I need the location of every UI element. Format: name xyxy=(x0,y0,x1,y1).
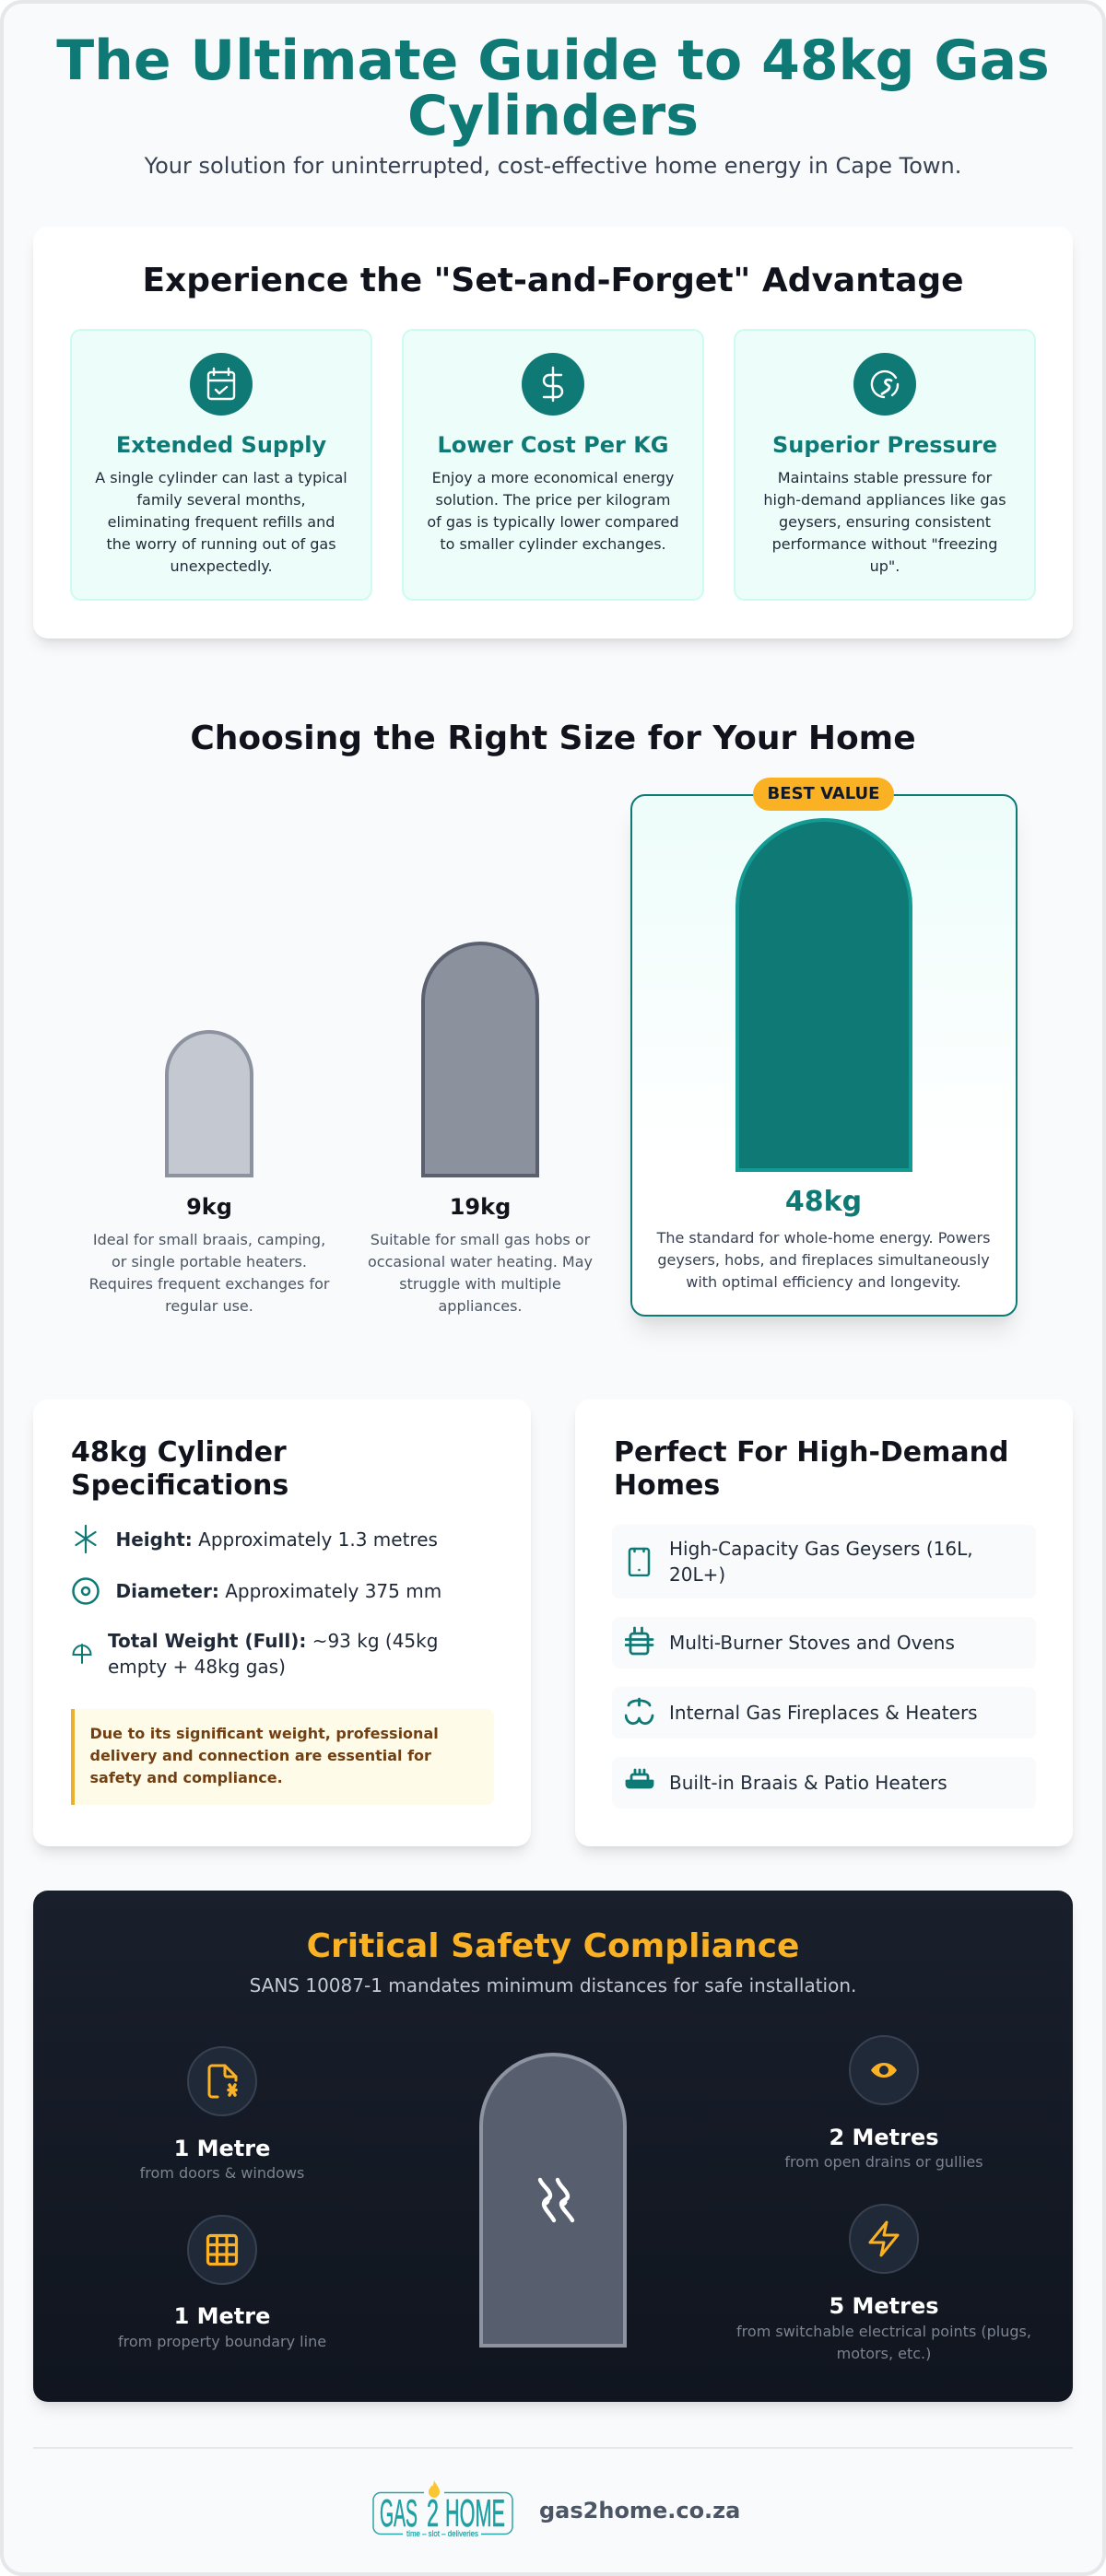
heading: specifications: 48kg Cylinder xyxy=(71,1436,287,1469)
text: total weight xyxy=(108,1630,438,1678)
item: braais and patio heaters xyxy=(612,1757,1036,1809)
logo: Gas 2 Home: 2 xyxy=(427,2491,439,2535)
heading: superior pressure: Superior Pressure xyxy=(772,432,997,458)
icon: pressure gauge xyxy=(853,353,916,416)
text: from drains: from open drains or gullies xyxy=(784,2153,983,2171)
text: superior pressure: Maintains stable pressure for xyxy=(778,469,992,486)
text: extended supply: the worry of running out of gas xyxy=(106,535,336,553)
icon: boundary grid xyxy=(187,2215,257,2285)
text: 9kg description xyxy=(89,1231,330,1315)
card: extended supply xyxy=(70,329,372,601)
text: gas geysers xyxy=(669,1538,973,1586)
text: from electrical points: motors, etc.) xyxy=(837,2345,931,2362)
text: lower cost: of gas is typically lower compared xyxy=(427,513,679,531)
badge: best value: BEST VALUE xyxy=(768,784,879,803)
text: 9kg description: Ideal for small braais, camping, xyxy=(93,1231,325,1248)
icon: gas flame xyxy=(538,2178,575,2222)
text: SANS standard: SANS 10087-1 mandates minimum distances for safe installation. xyxy=(250,1974,856,1996)
label: 5 metres: 5 Metres xyxy=(829,2293,939,2319)
text: 19kg description: Suitable for small gas hobs or xyxy=(371,1231,590,1248)
badge: best value xyxy=(753,778,894,811)
text: 9kg description: Requires frequent exchanges for xyxy=(89,1275,329,1293)
text: superior pressure: up". xyxy=(870,557,900,575)
text: superior pressure: geysers, ensuring consistent xyxy=(779,513,991,531)
text: from boundary: from property boundary line xyxy=(118,2333,326,2350)
text: website: gas2home.co.za xyxy=(539,2498,740,2523)
panel: set-and-forget advantage xyxy=(33,227,1073,638)
text: 19kg description: occasional water heating. May xyxy=(368,1253,593,1270)
heading: advantage: Experience the "Set-and-Forget" Advantage xyxy=(142,262,964,299)
text: 19kg description: appliances. xyxy=(438,1297,522,1315)
text: extended supply xyxy=(95,469,347,575)
heading: extended supply: Extended Supply xyxy=(116,432,326,458)
subtitle: Your solution for uninterrupted, cost-effective home energy in Cape Town. xyxy=(145,153,961,179)
text: extended supply: family several months, xyxy=(136,491,306,509)
heading: high-demand homes xyxy=(614,1436,1008,1502)
item: fireplaces and heaters xyxy=(612,1687,1036,1739)
logo: Gas 2 Home: time – slot – deliveries xyxy=(406,2529,478,2538)
panel: critical safety compliance xyxy=(33,1891,1073,2402)
heading: choosing the right size: Choosing the Right Size for Your Home xyxy=(190,720,916,757)
icon: door and window clearance xyxy=(187,2046,257,2116)
panel: high-demand homes xyxy=(575,1399,1073,1846)
text: diameter: Diameter: Approximately 375 mm xyxy=(116,1580,441,1602)
icon: burner xyxy=(625,1627,654,1655)
heading: high-demand homes: Homes xyxy=(614,1469,720,1502)
text: braais and patio heaters: Built-in Braais & Patio Heaters xyxy=(669,1772,947,1794)
text: lower cost: solution. The price per kilogram xyxy=(435,491,671,509)
icon: diameter xyxy=(72,1577,100,1605)
title: The Ultimate Guide to 48kg Gas xyxy=(56,29,1050,93)
cylinder: 9kg xyxy=(165,1030,253,1177)
text: gas geysers: 20L+) xyxy=(669,1563,725,1586)
text: superior pressure xyxy=(763,469,1006,575)
icon: dollar xyxy=(522,353,584,416)
panel: 48kg best value xyxy=(630,794,1018,1317)
text: 19kg description xyxy=(368,1231,593,1315)
text: 48kg description: The standard for whole-home energy. Powers xyxy=(657,1229,990,1247)
text: superior pressure: high-demand appliances like gas xyxy=(763,491,1006,509)
cylinder: centre xyxy=(479,2053,627,2348)
text: gas geysers: High-Capacity Gas Geysers (16L, xyxy=(669,1538,973,1560)
card: superior pressure xyxy=(734,329,1036,601)
title: Cylinders xyxy=(407,84,699,148)
label: 48kg: 48kg xyxy=(785,1186,862,1218)
card: lower cost per kg xyxy=(402,329,704,601)
heading: high-demand homes: Perfect For High-Demand xyxy=(614,1436,1008,1469)
text: total weight: Total Weight (Full): ~93 kg (45kg xyxy=(108,1630,438,1652)
text: from doors: from doors & windows xyxy=(140,2164,304,2182)
heading: lower cost: Lower Cost Per KG xyxy=(437,432,669,458)
text: 48kg description: geysers, hobs, and fireplaces simultaneously xyxy=(657,1251,990,1269)
logo: Gas 2 Home xyxy=(372,2480,513,2538)
text: 48kg description: with optimal efficiency and longevity. xyxy=(686,1273,961,1291)
text: 19kg description: struggle with multiple xyxy=(399,1275,561,1293)
item: stoves and ovens xyxy=(612,1617,1036,1669)
text: height: Height: Approximately 1.3 metres xyxy=(116,1528,438,1551)
text: 9kg description: regular use. xyxy=(165,1297,253,1315)
label: 19kg: 19kg xyxy=(450,1194,511,1220)
text: superior pressure: performance without "freezing xyxy=(772,535,997,553)
icon: braai xyxy=(625,1769,654,1789)
panel: specifications xyxy=(33,1399,531,1846)
heading: safety: Critical Safety Compliance xyxy=(307,1927,799,1965)
label: 9kg: 9kg xyxy=(186,1194,232,1220)
item: gas geysers xyxy=(612,1525,1036,1598)
icon: fireplace xyxy=(625,1697,654,1725)
icon: height xyxy=(75,1524,97,1553)
text: callout: safety and compliance. xyxy=(90,1769,283,1786)
text: lower cost xyxy=(427,469,679,553)
icon: weight xyxy=(72,1644,92,1664)
heading: specifications: Specifications xyxy=(71,1469,288,1502)
text: callout: Due to its significant weight, professional xyxy=(90,1725,439,1742)
cylinder: 48kg xyxy=(735,818,912,1172)
text: stoves and ovens: Multi-Burner Stoves and Ovens xyxy=(669,1632,955,1654)
cylinder: 19kg xyxy=(421,942,539,1177)
text: 48kg description xyxy=(656,1229,990,1291)
icon: geyser xyxy=(629,1548,651,1576)
text: total weight: empty + 48kg gas) xyxy=(108,1656,286,1678)
title xyxy=(56,29,1050,148)
text: 9kg description: or single portable heaters. xyxy=(112,1253,307,1270)
text: callout xyxy=(90,1725,439,1786)
text: lower cost: Enjoy a more economical energy xyxy=(432,469,674,486)
icon: electrical bolt xyxy=(849,2204,919,2274)
text: fireplaces and heaters: Internal Gas Fireplaces & Heaters xyxy=(669,1702,978,1724)
icon: drains eye xyxy=(849,2035,919,2105)
text: extended supply: eliminating frequent refills and xyxy=(108,513,335,531)
label: 1 metre boundary: 1 Metre xyxy=(174,2303,270,2329)
text: from electrical points xyxy=(736,2323,1031,2362)
text: extended supply: unexpectedly. xyxy=(170,557,273,575)
logo: Gas 2 Home: GAS xyxy=(380,2491,418,2535)
text: from electrical points: from switchable electrical points (plugs, xyxy=(736,2323,1031,2340)
text: extended supply: A single cylinder can last a typical xyxy=(95,469,347,486)
heading: specifications xyxy=(71,1436,288,1502)
callout: professional delivery xyxy=(70,1709,494,1805)
text: callout: delivery and connection are essential for xyxy=(90,1747,431,1764)
label: 1 metre doors: 1 Metre xyxy=(174,2136,270,2161)
label: 2 metres: 2 Metres xyxy=(829,2125,939,2150)
icon: calendar check xyxy=(190,353,253,416)
text: lower cost: to smaller cylinder exchanges. xyxy=(440,535,666,553)
